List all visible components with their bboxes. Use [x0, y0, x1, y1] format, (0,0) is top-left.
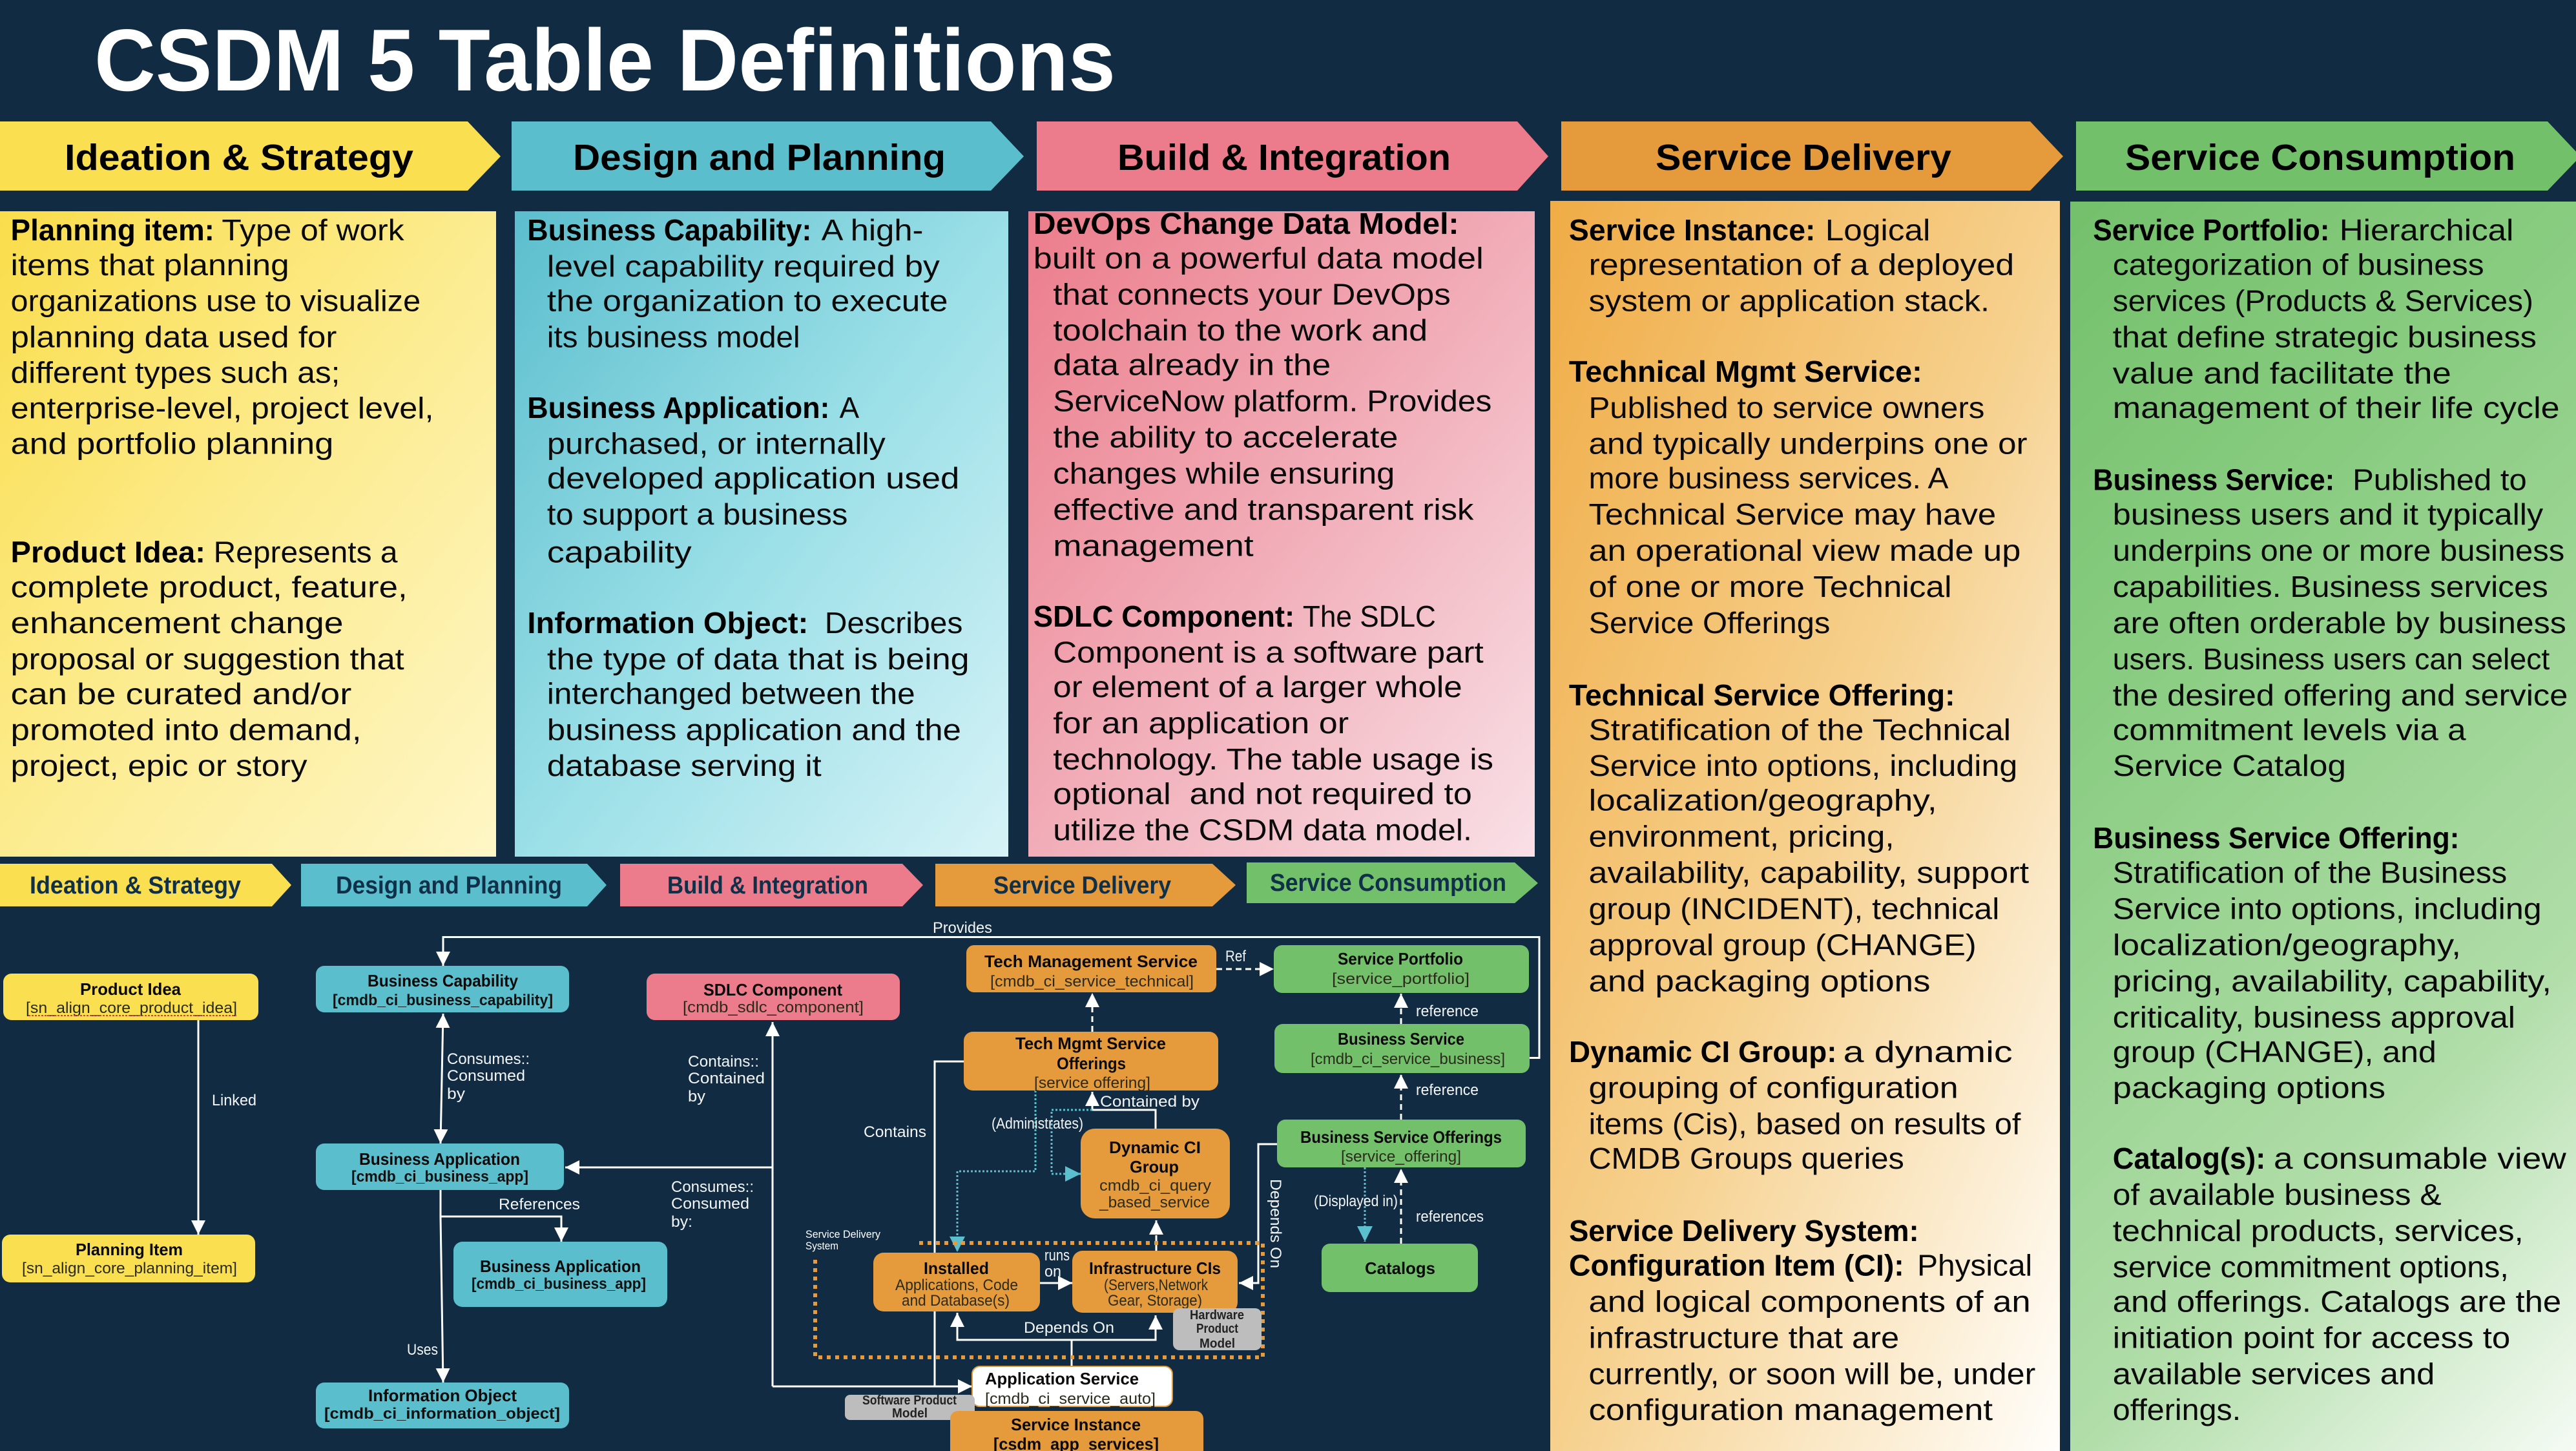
- chevron: Design and Planning: Design and Planning: [573, 137, 946, 178]
- box: Business Service: Business Service: [1338, 1029, 1464, 1049]
- diagram: service delivery system dotted boundary: [815, 1243, 1263, 1357]
- chevron small: Ideation & Strategy: Ideation & Strategy: [30, 872, 241, 899]
- label: Consumes:: Consumed by: by: [447, 1085, 465, 1103]
- text: teal panel definitions: A: [840, 391, 859, 424]
- box: Installed: and Database(s): [902, 1292, 1010, 1310]
- text: orange panel definitions: Technical Service Offering:: [1569, 678, 1955, 712]
- panel: Design and Planning definitions: [515, 211, 1008, 857]
- box: Tech Mgmt Service Offerings: Offerings: [1057, 1054, 1126, 1073]
- text: orange panel definitions: availability, capability, support: [1588, 856, 2029, 890]
- box: Infrastructure CIs: Gear, Storage): [1108, 1292, 1202, 1310]
- tag: Hardware Product Model: [1173, 1308, 1262, 1351]
- tag: Software Product Model: Model: [892, 1406, 928, 1421]
- text: green panel definitions: underpins one or more business: [2113, 534, 2564, 567]
- box: Service Instance: [950, 1411, 1203, 1451]
- chevron small: Service Consumption: [1247, 862, 1538, 903]
- text: green panel definitions: users. Business users can select: [2113, 642, 2550, 676]
- box: Infrastructure CIs: Infrastructure CIs: [1089, 1258, 1221, 1278]
- text: yellow panel definitions: Type of work: [222, 213, 405, 247]
- text: teal panel definitions: database serving it: [547, 749, 822, 782]
- box: Tech Management Service: [966, 945, 1216, 992]
- text: pink panel definitions: DevOps Change Data Model:: [1034, 207, 1459, 240]
- text: yellow panel definitions: different types such as;: [11, 356, 340, 390]
- box: Installed: Installed: [924, 1258, 989, 1278]
- label: Contains:: Contained by: by: [688, 1088, 705, 1105]
- text: pink panel definitions: optional and not required to: [1053, 777, 1472, 810]
- box: Information Object: [cmdb_ci_information_object]: [324, 1405, 560, 1423]
- text: yellow panel definitions: planning data used for: [11, 320, 337, 353]
- text: orange panel definitions: and typically underpins one or: [1588, 427, 2028, 461]
- text: teal panel definitions: the organization to execute: [547, 284, 948, 317]
- box: SDLC Component: [647, 974, 900, 1020]
- text: teal panel definitions: to support a business: [547, 497, 847, 531]
- box: Dynamic CI Group: cmdb_ci_query: [1099, 1177, 1211, 1195]
- box: SDLC Component: SDLC Component: [703, 980, 842, 999]
- box: Service Portfolio: [1274, 945, 1529, 993]
- text: teal panel definitions: [527, 213, 970, 782]
- text: orange panel definitions: Published to service owners: [1588, 391, 1984, 424]
- panel: Service Delivery definitions: [1550, 201, 2060, 1451]
- text: pink panel definitions: utilize the CSDM data model.: [1053, 813, 1472, 846]
- chevron: Service Consumption: Service Consumption: [2125, 137, 2515, 178]
- box: Tech Management Service: [cmdb_ci_service_technical]: [990, 973, 1194, 990]
- box: Application Service: Application Service: [985, 1369, 1139, 1388]
- label: Contains:: Contained by: Contains::: [688, 1053, 759, 1070]
- text: orange panel definitions: Technical Mgmt Service:: [1569, 355, 1922, 388]
- box: Tech Mgmt Service Offerings: [service offering]: [1034, 1074, 1150, 1092]
- text: green panel definitions: management of their life cycle: [2113, 391, 2560, 424]
- text: green panel definitions: service commitment options,: [2113, 1250, 2509, 1284]
- text: pink panel definitions: Component is a software part: [1053, 636, 1484, 669]
- text: green panel definitions: Business Service:: [2093, 463, 2334, 497]
- text: green panel definitions: capabilities. Business services: [2113, 570, 2548, 603]
- text: yellow panel definitions: can be curated and/or: [11, 677, 351, 711]
- label: Contains: Contains: [864, 1123, 926, 1141]
- text: pink panel definitions: The SDLC: [1303, 600, 1436, 633]
- text: pink panel definitions: built on a powerful data model: [1034, 241, 1484, 275]
- box: Business Capability: Business Capability: [368, 971, 519, 990]
- label: Linked: Linked: [212, 1092, 256, 1109]
- box: Infrastructure CIs: (Servers,Network: [1104, 1277, 1209, 1294]
- label: Contains:: Contained by: Contained: [688, 1070, 765, 1087]
- chevron: Ideation & Strategy: Ideation & Strategy: [65, 137, 413, 178]
- diagram: connectors: [198, 937, 1539, 1386]
- box: Application Service: [cmdb_ci_service_auto]: [985, 1390, 1156, 1408]
- box: Installed: Applications, Code: [895, 1277, 1018, 1294]
- label: Service Delivery System: [805, 1228, 880, 1252]
- box: Application Service: [972, 1366, 1172, 1408]
- text: green panel definitions: services (Products & Services): [2113, 284, 2533, 317]
- text: yellow panel definitions: Planning item:: [11, 213, 214, 247]
- box: Product Idea: Product Idea: [80, 979, 182, 999]
- tag: Hardware Product Model: Product: [1196, 1322, 1238, 1336]
- text: orange panel definitions: items (Cis), based on results of: [1588, 1107, 2021, 1141]
- text: teal panel definitions: capability: [547, 536, 692, 569]
- box: Dynamic CI Group: _based_service: [1099, 1194, 1210, 1211]
- text: teal panel definitions: Describes: [825, 606, 962, 640]
- box: Dynamic CI Group: Group: [1130, 1157, 1179, 1176]
- text: green panel definitions: Catalog(s):: [2113, 1142, 2265, 1175]
- text: green panel definitions: and offerings. Catalogs are the: [2113, 1284, 2561, 1318]
- text: green panel definitions: [2093, 213, 2568, 1426]
- box: Planning Item: [2, 1235, 255, 1282]
- box: Catalogs: [1322, 1244, 1478, 1292]
- text: pink panel definitions: data already in the: [1053, 348, 1331, 382]
- label: Uses: Uses: [407, 1341, 438, 1359]
- tag: Hardware Product Model: Hardware: [1190, 1308, 1244, 1322]
- label: Service Delivery System: Service Delivery: [805, 1228, 880, 1240]
- text: orange panel definitions: infrastructure that are: [1588, 1321, 1899, 1354]
- chevron small: Design and Planning: [301, 864, 607, 906]
- text: teal panel definitions: business application and the: [547, 713, 961, 746]
- text: orange panel definitions: a dynamic: [1844, 1035, 2013, 1069]
- text: orange panel definitions: group (INCIDENT), technical: [1588, 892, 1999, 926]
- text: orange panel definitions: Technical Service may have: [1588, 497, 1996, 531]
- text: pink panel definitions: that connects your DevOps: [1053, 277, 1451, 311]
- text: pink panel definitions: management: [1053, 528, 1254, 562]
- box: Information Object: Information Object: [368, 1386, 517, 1405]
- label: (Administrates): (Administrates): [992, 1115, 1083, 1133]
- box: Business Application: [316, 1143, 564, 1190]
- text: orange panel definitions: system or application stack.: [1588, 284, 1989, 317]
- text: pink panel definitions: [1034, 207, 1493, 846]
- text: orange panel definitions: and packaging options: [1588, 964, 1930, 997]
- box: Installed: [873, 1253, 1040, 1311]
- chevron small: Design and Planning: Design and Planning: [336, 872, 562, 899]
- text: pink panel definitions: toolchain to the work and: [1053, 313, 1428, 347]
- text: green panel definitions: commitment levels via a: [2113, 713, 2466, 746]
- text: yellow panel definitions: items that planning: [11, 248, 289, 282]
- text: pink panel definitions: SDLC Component:: [1034, 600, 1294, 633]
- label: Contains:: Contained by: [688, 1053, 765, 1105]
- box: Business Service: [1274, 1024, 1530, 1073]
- box: Business Application (referenced): [453, 1242, 667, 1307]
- text: orange panel definitions: Configuration Item (CI):: [1569, 1248, 1904, 1282]
- text: teal panel definitions: developed application used: [547, 461, 959, 495]
- label: Contained by: Contained by: [1100, 1093, 1200, 1111]
- tag: Software Product Model: Software Product: [862, 1394, 957, 1408]
- box: Catalogs: Catalogs: [1365, 1258, 1435, 1278]
- label: Service Delivery System: System: [805, 1240, 838, 1252]
- box: Service Instance: Service Instance: [1011, 1415, 1141, 1434]
- panel: Service Consumption definitions: [2070, 202, 2576, 1451]
- chevron small: Service Consumption: Service Consumption: [1270, 870, 1506, 897]
- text: teal panel definitions: the type of data that is being: [547, 642, 970, 676]
- box: Tech Mgmt Service Offerings: Tech Mgmt Service: [1015, 1034, 1166, 1053]
- text: teal panel definitions: its business model: [547, 320, 800, 353]
- panel: Ideation & Strategy definitions: [0, 211, 496, 857]
- box: Business Service: [cmdb_ci_service_business]: [1311, 1050, 1505, 1068]
- text: orange panel definitions: Service Offerings: [1588, 606, 1830, 640]
- box: Tech Mgmt Service Offerings: [964, 1032, 1218, 1092]
- label: runs on: on: [1044, 1263, 1061, 1280]
- chevron: Service Delivery: Service Delivery: [1656, 137, 1951, 178]
- chevron: Service Consumption: [2076, 121, 2576, 191]
- box: Product Idea: [3, 974, 258, 1020]
- text: orange panel definitions: grouping of configuration: [1588, 1071, 1958, 1105]
- chevron: Ideation & Strategy: [0, 121, 501, 191]
- text: green panel definitions: business users and it typically: [2113, 497, 2543, 531]
- chevron small: Build & Integration: Build & Integration: [667, 872, 868, 899]
- text: orange panel definitions: approval group (CHANGE): [1588, 928, 1977, 961]
- text: orange panel definitions: an operational view made up: [1588, 534, 2020, 567]
- box: Business Service Offerings: [1277, 1120, 1526, 1167]
- box: Business Application: [cmdb_ci_business_app]: [351, 1168, 528, 1185]
- title: CSDM 5 Table Definitions: [94, 11, 1116, 109]
- text: pink panel definitions: changes while ensuring: [1053, 457, 1395, 490]
- text: pink panel definitions: the ability to accelerate: [1053, 421, 1398, 454]
- diagram: lower chevrons row: [0, 862, 1538, 906]
- text: orange panel definitions: Logical: [1825, 213, 1930, 247]
- text: orange panel definitions: currently, or soon will be, under: [1588, 1357, 2035, 1390]
- text: orange panel definitions: Service Delivery System:: [1569, 1214, 1919, 1247]
- text: green panel definitions: the desired offering and service: [2113, 678, 2568, 712]
- text: orange panel definitions: Service Instance:: [1569, 213, 1815, 247]
- text: yellow panel definitions: proposal or suggestion that: [11, 642, 404, 676]
- text: teal panel definitions: A high-: [822, 213, 923, 247]
- text: yellow panel definitions: complete product, feature,: [11, 570, 408, 604]
- label: Depends On vertical: Depends On: [1267, 1179, 1284, 1268]
- text: orange panel definitions: of one or more Technical: [1588, 570, 1952, 603]
- box: Business Application: Business Application: [359, 1149, 520, 1169]
- text: green panel definitions: initiation point for access to: [2113, 1321, 2510, 1354]
- text: yellow panel definitions: project, epic or story: [11, 749, 307, 782]
- tag: Software Product Model: [845, 1394, 975, 1421]
- text: yellow panel definitions: enterprise-level, project level,: [11, 391, 433, 424]
- text: teal panel definitions: purchased, or internally: [547, 427, 886, 461]
- text: green panel definitions: Service Portfolio:: [2093, 213, 2330, 247]
- text: pink panel definitions: technology. The table usage is: [1053, 742, 1493, 776]
- label: references: references: [1416, 1208, 1484, 1226]
- text: green panel definitions: of available business &: [2113, 1178, 2441, 1211]
- text: green panel definitions: Stratification of the Business: [2113, 856, 2507, 890]
- box: Business Application (referenced): Business Application: [480, 1257, 641, 1276]
- text: green panel definitions: are often orderable by business: [2113, 606, 2566, 640]
- label: Consumes:: Consumed by:: Consumed: [671, 1195, 749, 1213]
- text: orange panel definitions: [1569, 213, 2035, 1426]
- header chevrons row: [0, 121, 2576, 191]
- text: teal panel definitions: Business Application:: [527, 391, 829, 424]
- text: green panel definitions: Published to: [2353, 463, 2527, 497]
- box: Business Capability: [316, 966, 569, 1012]
- label: Consumes:: Consumed by: [447, 1050, 530, 1103]
- label: runs on: [1044, 1247, 1070, 1280]
- label: reference: reference: [1416, 1081, 1479, 1099]
- text: orange panel definitions: Service into options, including: [1588, 749, 2017, 782]
- text: green panel definitions: technical products, services,: [2113, 1214, 2524, 1247]
- text: yellow panel definitions: promoted into demand,: [11, 713, 362, 746]
- text: green panel definitions: criticality, business approval: [2113, 1000, 2515, 1034]
- text: orange panel definitions: CMDB Groups queries: [1588, 1142, 1904, 1175]
- box: Dynamic CI Group: Dynamic CI: [1109, 1138, 1201, 1157]
- text: green panel definitions: Service into options, including: [2113, 892, 2542, 926]
- chevron small: Service Delivery: [935, 864, 1236, 906]
- label: Depends On: Depends On: [1024, 1319, 1114, 1337]
- label: Provides: Provides: [933, 919, 992, 937]
- label: (Displayed in): (Displayed in): [1314, 1193, 1398, 1210]
- text: green panel definitions: localization/geography,: [2113, 928, 2461, 961]
- text: green panel definitions: offerings.: [2113, 1393, 2241, 1426]
- box: Business Capability: [cmdb_ci_business_capability]: [333, 992, 553, 1009]
- label: Consumes:: Consumed by: Consumed: [447, 1067, 525, 1085]
- text: teal panel definitions: Information Object:: [527, 606, 808, 640]
- chevron: Service Delivery: [1561, 121, 2063, 191]
- box: Planning Item: [sn_align_core_planning_item]: [22, 1260, 237, 1277]
- text: orange panel definitions: more business services. A: [1588, 461, 1949, 495]
- text: orange panel definitions: and logical components of an: [1588, 1284, 2031, 1318]
- text: yellow panel definitions: and portfolio planning: [11, 427, 333, 461]
- text: green panel definitions: that define strategic business: [2113, 320, 2537, 353]
- label: Consumes:: Consumed by:: [671, 1178, 754, 1231]
- text: pink panel definitions: effective and transparent risk: [1053, 492, 1475, 526]
- text: orange panel definitions: representation of a deployed: [1588, 248, 2014, 282]
- text: green panel definitions: packaging options: [2113, 1071, 2385, 1105]
- box: Product Idea: [sn_align_core_product_idea]: [26, 999, 237, 1017]
- text: green panel definitions: Business Service Offering:: [2093, 821, 2459, 855]
- label: Consumes:: Consumed by:: by:: [671, 1213, 692, 1231]
- chevron: Design and Planning: [512, 121, 1024, 191]
- label: runs on: runs: [1044, 1247, 1070, 1264]
- text: yellow panel definitions: organizations use to visualize: [11, 284, 421, 317]
- text: green panel definitions: value and facilitate the: [2113, 356, 2451, 390]
- chevron: Build & Integration: [1037, 121, 1548, 191]
- text: green panel definitions: pricing, availability, capability,: [2113, 964, 2551, 997]
- label: Consumes:: Consumed by:: Consumes::: [671, 1178, 754, 1196]
- box: Business Service Offerings: [service_offering]: [1341, 1148, 1461, 1165]
- text: green panel definitions: group (CHANGE), and: [2113, 1035, 2436, 1069]
- text: pink panel definitions: ServiceNow platform. Provides: [1053, 384, 1491, 418]
- text: green panel definitions: a consumable view: [2274, 1142, 2567, 1175]
- text: pink panel definitions: for an application or: [1053, 706, 1349, 740]
- text: orange panel definitions: Stratification of the Technical: [1588, 713, 2011, 746]
- box: Service Portfolio: Service Portfolio: [1338, 949, 1463, 968]
- panel: Build & Integration definitions: [1028, 207, 1535, 857]
- text: yellow panel definitions: [11, 213, 433, 782]
- tag: Hardware Product Model: Model: [1200, 1337, 1235, 1351]
- text: green panel definitions: Service Catalog: [2113, 749, 2346, 782]
- label: reference: reference: [1416, 1003, 1479, 1020]
- chevron small: Ideation & Strategy: [0, 864, 291, 906]
- text: green panel definitions: Hierarchical: [2340, 213, 2513, 247]
- box: Infrastructure CIs: [1072, 1251, 1238, 1313]
- text: orange panel definitions: localization/geography,: [1588, 784, 1937, 817]
- text: yellow panel definitions: enhancement change: [11, 606, 344, 640]
- text: orange panel definitions: environment, pricing,: [1588, 820, 1895, 853]
- text: orange panel definitions: Physical: [1917, 1248, 2032, 1282]
- text: yellow panel definitions: Represents a: [214, 536, 398, 569]
- text: pink panel definitions: or element of a larger whole: [1053, 670, 1462, 704]
- text: green panel definitions: available services and: [2113, 1357, 2435, 1390]
- text: yellow panel definitions: Product Idea:: [11, 536, 205, 569]
- box: SDLC Component: [cmdb_sdlc_component]: [683, 999, 864, 1016]
- text: green panel definitions: categorization of business: [2113, 248, 2484, 282]
- box: Business Application (referenced): [cmdb_ci_business_app]: [472, 1275, 646, 1293]
- box: Planning Item: Planning Item: [76, 1240, 183, 1259]
- text: orange panel definitions: Dynamic CI Group:: [1569, 1035, 1837, 1069]
- label: References: References: [499, 1196, 580, 1213]
- chevron small: Service Delivery: Service Delivery: [993, 872, 1171, 899]
- label: Ref: Ref: [1225, 948, 1246, 965]
- text: teal panel definitions: interchanged between the: [547, 676, 915, 710]
- box: Information Object: [316, 1383, 569, 1428]
- text: teal panel definitions: Business Capability:: [527, 213, 811, 247]
- chevron: Build & Integration: Build & Integration: [1117, 137, 1451, 178]
- box: Tech Management Service: Tech Management Service: [984, 952, 1198, 971]
- text: teal panel definitions: level capability required by: [547, 249, 940, 283]
- box: Service Portfolio: [service_portfolio]: [1332, 970, 1470, 988]
- box: Dynamic CI Group: [1081, 1129, 1230, 1218]
- chevron small: Build & Integration: [620, 864, 923, 906]
- text: orange panel definitions: configuration management: [1588, 1393, 1993, 1426]
- box: Business Service Offerings: Business Service Offerings: [1300, 1127, 1502, 1147]
- label: Consumes:: Consumed by: Consumes::: [447, 1050, 530, 1068]
